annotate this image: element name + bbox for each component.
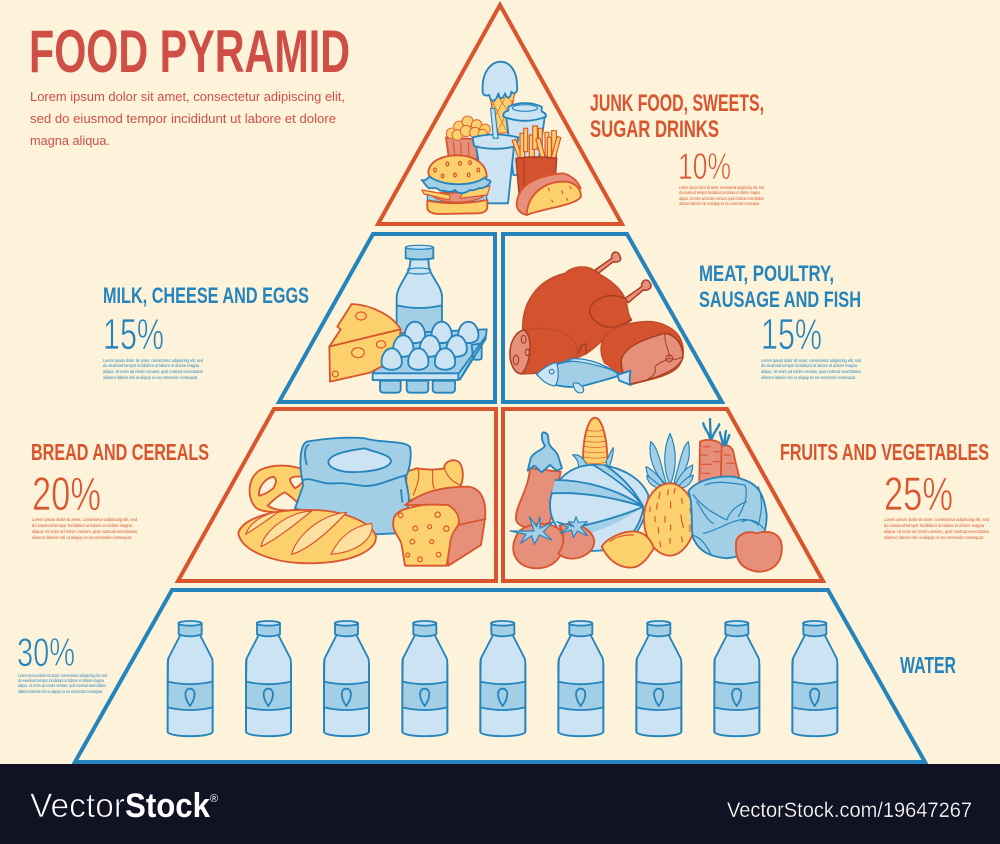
heading: meat bbox=[699, 261, 861, 312]
description: milk: Lorem ipsum dolor sit amet, consectetur adipiscing elit, sed bbox=[103, 358, 203, 363]
tier: fruits and vegetables trapezoid bbox=[503, 409, 823, 581]
percentage: 15% milk: 15% bbox=[103, 310, 164, 359]
description: junk food: aliqua. Ut enim ad minim veniam, quis nostrud exercitation bbox=[679, 196, 764, 201]
intro text bbox=[30, 89, 345, 148]
percentage: 15% meat: 15% bbox=[761, 310, 822, 359]
description: bread: aliqua. Ut enim ad minim veniam, quis nostrud exercitation bbox=[32, 529, 137, 534]
description: meat: do eiusmod tempor incididunt ut labore et dolore magna bbox=[761, 363, 857, 368]
tier: milk trapezoid bbox=[279, 234, 495, 402]
illustration: fruits and vegetables bbox=[510, 418, 782, 572]
percentage: 10%: 10% bbox=[678, 146, 731, 187]
description: junk food: Lorem ipsum dolor sit amet, consectetur adipiscing elit, sed bbox=[679, 185, 764, 190]
intro text: magna aliqua. bbox=[30, 133, 110, 148]
heading: milk, cheese and eggs: MILK, CHEESE AND EGGS bbox=[103, 283, 309, 308]
intro text: Lorem ipsum dolor sit amet, consectetur adipiscing elit, bbox=[30, 89, 345, 104]
heading: meat: MEAT, POULTRY, bbox=[699, 261, 834, 286]
footer bar: Stock bbox=[125, 787, 210, 825]
description: bread bbox=[32, 517, 137, 540]
description: water: aliqua. Ut enim ad minim veniam, quis nostrud exercitation bbox=[18, 683, 106, 688]
percentage: 25%: 25% bbox=[884, 467, 953, 520]
heading: junk food: SUGAR DRINKS bbox=[590, 116, 719, 143]
description: junk food bbox=[679, 185, 764, 206]
description: meat: Lorem ipsum dolor sit amet, consectetur adipiscing elit, sed bbox=[761, 358, 861, 363]
heading: junk food: JUNK FOOD, SWEETS, bbox=[590, 90, 764, 117]
tier: junk food triangle bbox=[378, 5, 622, 224]
description: milk: aliqua. Ut enim ad minim veniam, quis nostrud exercitation bbox=[103, 369, 203, 374]
footer bar: VectorStock.com/19647267 bbox=[727, 799, 972, 822]
heading: junk food bbox=[590, 90, 764, 143]
description: water: do eiusmod tempor incididunt ut labore et dolore magna bbox=[18, 678, 104, 683]
title: FOOD PYRAMID bbox=[29, 18, 350, 85]
illustration: bread and cereals bbox=[238, 438, 486, 566]
illustration: junk food bbox=[422, 62, 581, 215]
description: meat: aliqua. Ut enim ad minim veniam, quis nostrud exercitation bbox=[761, 369, 861, 374]
description: fruits: do eiusmod tempor incididunt ut labore et dolore magna bbox=[884, 523, 984, 528]
description: meat: ullamco laboris nisi ut aliquip ex ea commodo consequat. bbox=[761, 375, 856, 380]
footer bar: ® bbox=[210, 793, 218, 805]
heading: bread and cereals: BREAD AND CEREALS bbox=[31, 439, 209, 465]
description: water: ullamco laboris nisi ut aliquip ex ea commodo consequat. bbox=[18, 689, 103, 694]
description: meat bbox=[761, 358, 861, 380]
illustration: meat, poultry, sausage and fish bbox=[510, 252, 683, 393]
description: bread: Lorem ipsum dolor sit amet, consectetur adipiscing elit, sed bbox=[32, 517, 137, 522]
description: water: Lorem ipsum dolor sit amet, consectetur adipiscing elit, sed bbox=[18, 673, 107, 678]
description: junk food: do eiusmod tempor incididunt ut labore et dolore magna bbox=[679, 190, 760, 195]
description: fruits: ullamco laboris nisi ut aliquip ex ea commodo consequat. bbox=[884, 535, 984, 540]
description: milk: ullamco laboris nisi ut aliquip ex ea commodo consequat. bbox=[103, 375, 198, 380]
description: fruits: aliqua. Ut enim ad minim veniam, quis nostrud exercitation bbox=[884, 529, 989, 534]
tier: bread trapezoid bbox=[178, 409, 496, 581]
description: bread: do eiusmod tempor incididunt ut labore et dolore magna bbox=[32, 523, 132, 528]
description: milk bbox=[103, 358, 203, 380]
illustration: nine water bottles bbox=[168, 621, 837, 736]
tier: water trapezoid bbox=[75, 590, 925, 762]
illustration: milk, cheese and eggs bbox=[329, 245, 487, 393]
description: fruits bbox=[884, 517, 989, 540]
heading: water: WATER bbox=[900, 652, 956, 678]
description: water bbox=[18, 673, 107, 694]
description: bread: ullamco laboris nisi ut aliquip ex ea commodo consequat. bbox=[32, 535, 132, 540]
footer bar bbox=[0, 764, 1000, 844]
description: milk: do eiusmod tempor incididunt ut labore et dolore magna bbox=[103, 363, 199, 368]
description: junk food: ullamco laboris nisi ut aliquip ex ea commodo consequat. bbox=[679, 201, 760, 206]
percentage: 30%: 30% bbox=[17, 631, 75, 675]
percentage: 20%: 20% bbox=[32, 467, 101, 520]
tier: meat trapezoid bbox=[503, 234, 722, 402]
footer bar: Vector bbox=[30, 787, 125, 825]
heading: meat: SAUSAGE AND FISH bbox=[699, 287, 861, 312]
intro text: sed do eiusmod tempor incididunt ut labore et dolore bbox=[30, 111, 336, 126]
